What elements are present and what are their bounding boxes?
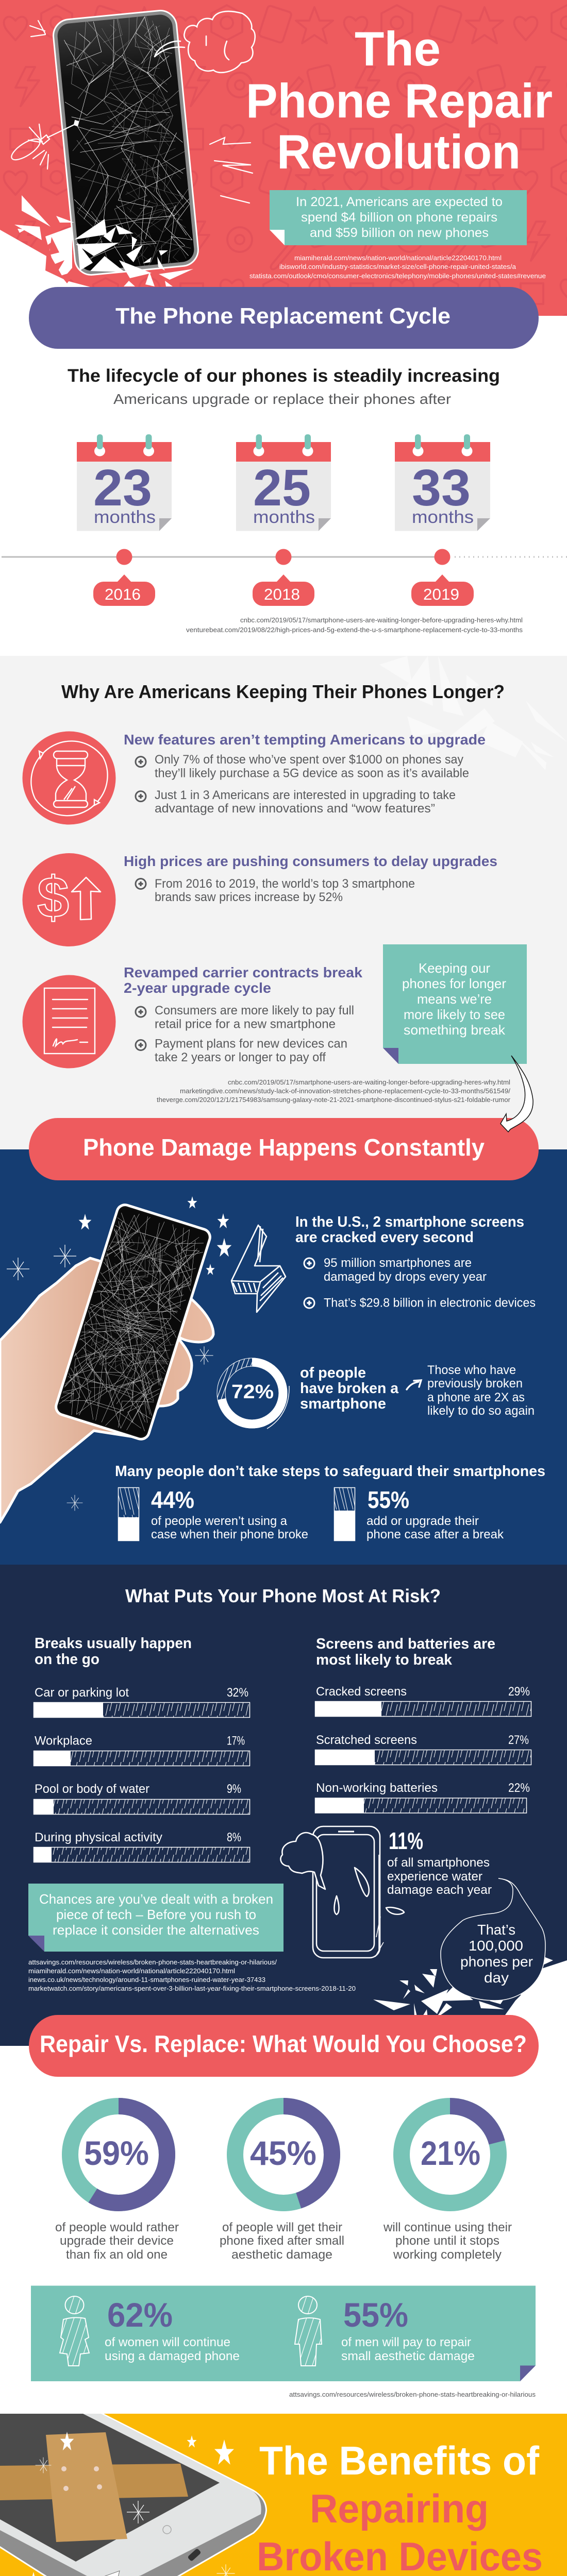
stat: water damage: 11%	[389, 1827, 423, 1854]
reasons sources: marketingdive.com/news/study-lack-of-innovation-stretches-phone-replacement-cycle-to-33-months/561549/	[180, 1087, 510, 1095]
section heading: replacement cycle: The Phone Replacement Cycle	[115, 303, 451, 329]
donut chart: 45 percent: aesthetic damage	[231, 2248, 332, 2262]
white torn corner under hero	[0, 230, 90, 319]
reason 1: new features: advantage of new innovations and “wow features”	[155, 802, 435, 816]
stat: water damage: of all smartphones	[387, 1856, 490, 1870]
stat: smartphone screens cracked: That’s $29.8 billion in electronic devices	[324, 1296, 536, 1310]
donut chart: 45 percent	[220, 2106, 344, 2262]
callout: consider alternatives: replace it consider the alternatives	[53, 1922, 259, 1938]
reasons sources: cnbc.com/2019/05/17/smartphone-users-are-waiting-longer-before-upgrading-heres-why.html	[228, 1078, 510, 1086]
callout: keeping phones longer: more likely to see	[404, 1007, 505, 1022]
lifecycle sources	[186, 616, 523, 634]
title: Revolution	[277, 125, 521, 179]
reason 2: high prices: High prices are pushing consumers to delay upgrades	[124, 853, 497, 869]
stat: likely to break again: previously broken	[427, 1377, 523, 1391]
donut chart: 21 percent: 21%	[421, 2134, 480, 2172]
bar chart: what breaks	[315, 1636, 531, 1814]
donut chart: 21 percent	[383, 2106, 512, 2262]
stat: have broken a smartphone	[300, 1365, 399, 1412]
risk sources: marketwatch.com/story/americans-spent-over-3-billion-last-year-fixing-their-smartphone-screens-2018-11-20	[28, 1985, 356, 1992]
stat: 55 percent of men: of men will pay to repair	[341, 2335, 471, 2349]
hero sources: miamiherald.com/news/nation-world/national/article222040170.html	[294, 254, 502, 262]
calendar: 2016: months	[94, 507, 156, 527]
donut chart: 59 percent: of people would rather	[55, 2221, 179, 2234]
bar chart: where breaks happen	[34, 1635, 249, 1862]
reason 1: new features: New features aren’t tempting Americans to upgrade	[124, 732, 486, 748]
stat: smartphone screens cracked	[295, 1214, 536, 1310]
stat: smartphone screens cracked: 95 million smartphones are	[324, 1256, 472, 1270]
reason 3: carrier contracts: Payment plans for new devices can	[155, 1037, 347, 1051]
donut chart: 59 percent	[55, 2106, 179, 2262]
timeline: 2018	[264, 585, 300, 603]
section background: what puts your phone at risk	[0, 1565, 567, 2046]
bar chart: where breaks happen: 8%	[227, 1831, 241, 1844]
icon: lightning bolt	[231, 1225, 286, 1312]
reasons sources	[157, 1078, 511, 1104]
stat: 62 percent of women: using a damaged phone	[105, 2349, 240, 2363]
section heading: phone damage: Phone Damage Happens Constantly	[83, 1134, 485, 1161]
stat: likely to break again: Those who have	[427, 1363, 516, 1377]
bar chart: what breaks: Cracked screens	[316, 1685, 407, 1699]
stat: smartphone screens cracked: damaged by drops every year	[324, 1270, 487, 1284]
donut chart: 72 percent	[217, 1358, 289, 1429]
icon: hourglass	[23, 732, 115, 824]
section heading: repair vs replace: Repair Vs. Replace: What Would You Choose?	[40, 2030, 527, 2057]
donut chart: 59 percent: 59%	[84, 2134, 149, 2172]
faint shards	[379, 656, 567, 770]
stat: 55 percent: add or upgrade their	[366, 1514, 479, 1528]
hand	[0, 1258, 213, 1522]
arrow to damage section	[501, 1056, 533, 1132]
icon: contract	[23, 975, 115, 1069]
bar chart: where breaks happen: During physical activity	[35, 1831, 162, 1844]
donut chart: 45 percent: of people will get their	[222, 2221, 342, 2234]
reason 1: new features: Only 7% of those who’ve spent over $1000 on phones say	[155, 753, 463, 767]
bar chart: where breaks happen: Car or parking lot	[35, 1686, 129, 1700]
stat: 55 percent of men: 55%	[343, 2296, 408, 2334]
title	[246, 22, 553, 179]
donut chart: 45 percent: 45%	[250, 2134, 316, 2172]
lifecycle heading: The lifecycle of our phones is steadily increasing	[68, 366, 500, 386]
stat: have broken a smartphone: of people	[300, 1365, 366, 1381]
risk sources	[28, 1958, 356, 1992]
stat: 44 percent	[118, 1486, 308, 1541]
callout: consider alternatives: piece of tech – Before you rush to	[56, 1907, 256, 1922]
callout: spending stat: In 2021, Americans are expected to	[296, 195, 503, 209]
lifecycle sources: cnbc.com/2019/05/17/smartphone-users-are-waiting-longer-before-upgrading-heres-why.html	[240, 616, 523, 624]
reason 3: carrier contracts	[124, 964, 362, 1064]
risk sources: attsavings.com/resources/wireless/broken-phone-stats-heartbreaking-or-hilarious/	[28, 1958, 277, 1966]
bar chart: where breaks happen: Workplace	[35, 1734, 92, 1748]
speech bubble: 100,000 phones per day: day	[484, 1970, 509, 1986]
stat: 44 percent: of people weren’t using a	[151, 1514, 288, 1528]
stat: 62 percent of women	[105, 2296, 240, 2363]
safeguard heading: Many people don’t take steps to safeguard their smartphones	[115, 1463, 545, 1480]
reason 1: new features: they’ll likely purchase a 5G device as soon as it’s available	[155, 766, 469, 780]
stat: have broken a smartphone: have broken a	[300, 1380, 399, 1397]
donut chart: 21 percent: phone until it stops	[395, 2234, 499, 2248]
timeline: 2019	[423, 585, 459, 603]
icon: water-damaged phone	[280, 1826, 404, 1958]
risk heading: What Puts Your Phone Most At Risk?	[125, 1585, 441, 1606]
bar chart: where breaks happen: Pool or body of water	[35, 1782, 149, 1796]
lifecycle subheading: Americans upgrade or replace their phones after	[113, 391, 451, 407]
donut chart: 59 percent: upgrade their device	[60, 2234, 174, 2248]
callout: consider alternatives: Chances are you’ve dealt with a broken	[39, 1891, 273, 1907]
bar chart: where breaks happen: 9%	[227, 1782, 241, 1796]
stat: smartphone screens cracked: In the U.S., 2 smartphone screens	[295, 1214, 524, 1230]
calendar: 2018: 25	[253, 459, 311, 517]
title: benefits of repairing: The Benefits of	[259, 2438, 540, 2483]
icon: dollar and arrow	[23, 853, 115, 946]
bar chart: where breaks happen: 32%	[227, 1686, 248, 1700]
white torn corner: risk section	[373, 1926, 567, 2048]
calendar: 2019: months	[412, 507, 474, 527]
calendar: 2019: 33	[412, 459, 471, 517]
stat: 55 percent of men	[341, 2296, 475, 2363]
bar chart: what breaks: 27%	[508, 1733, 529, 1747]
hero sources: statista.com/outlook/cmo/consumer-electronics/telephony/mobile-phones/united-states#revenue	[249, 272, 546, 280]
reason 2: high prices: From 2016 to 2019, the world’s top 3 smartphone	[155, 877, 415, 891]
stat: 55 percent of men: small aesthetic damage	[341, 2349, 475, 2363]
speech bubble: 100,000 phones per day: phones per	[460, 1954, 533, 1970]
risk sources: miamiherald.com/news/nation-world/national/article222040170.html	[28, 1967, 235, 1975]
stat: have broken a smartphone: smartphone	[300, 1396, 386, 1412]
section background: phone damage	[0, 1149, 567, 1565]
reason 3: carrier contracts: take 2 years or longer to pay off	[155, 1050, 326, 1064]
callout: spending stat: spend $4 billion on phone repairs	[301, 210, 497, 225]
stat: 55 percent	[334, 1486, 504, 1541]
callout: spending stat	[270, 190, 527, 245]
donut chart: 21 percent: will continue using their	[383, 2221, 512, 2234]
calendar: 2016	[77, 434, 172, 531]
stat: 62 percent of women: 62%	[107, 2296, 173, 2334]
section heading: phone damage	[29, 1118, 539, 1180]
red shard gaps	[44, 237, 77, 283]
bar chart: where breaks happen: 17%	[227, 1734, 245, 1748]
donut chart: 72 percent: 72%	[231, 1381, 274, 1403]
repair vs replace source: attsavings.com/resources/wireless/broken-phone-stats-heartbreaking-or-hilarious	[289, 2391, 536, 2398]
stat: water damage: damage each year	[387, 1883, 492, 1897]
reason 1: new features: Just 1 in 3 Americans are interested in upgrading to take	[155, 788, 456, 802]
icon: dollar and arrow: $	[37, 865, 69, 929]
timeline	[2, 549, 567, 606]
calendar: 2018: months	[253, 507, 315, 527]
callout: keeping phones longer: phones for longer	[402, 976, 506, 991]
stat: 44 percent: 44%	[151, 1486, 194, 1513]
bar chart: what breaks: 22%	[508, 1781, 530, 1795]
stars and sparkles	[26, 2432, 235, 2576]
callout: consider alternatives	[28, 1884, 284, 1952]
callout: keeping phones longer: Keeping our	[419, 960, 490, 976]
reason 3: carrier contracts: retail price for a new smartphone	[155, 1018, 336, 1031]
stat: water damage: experience water	[387, 1870, 482, 1884]
reason 3: carrier contracts: 2-year upgrade cycle	[124, 980, 271, 996]
stat: 55 percent: phone case after a break	[366, 1528, 504, 1541]
bar chart: where breaks happen: Breaks usually happen	[35, 1635, 192, 1652]
stat: water damage	[387, 1827, 492, 1897]
reason 1: new features	[124, 732, 486, 816]
title: The	[355, 22, 441, 76]
panel: women and men stats	[31, 2285, 536, 2381]
stat: likely to break again: a phone are 2X as	[427, 1391, 525, 1404]
hero phone photo	[52, 9, 199, 277]
bar chart: what breaks: Non-working batteries	[316, 1781, 438, 1795]
smoke cloud doodle	[155, 11, 255, 73]
title: Phone Repair	[246, 74, 553, 128]
lifecycle sources: venturebeat.com/2019/08/22/high-prices-and-5g-extend-the-u-s-smartphone-replacement-cycle-to-33-months	[186, 626, 523, 634]
callout: keeping phones longer: something break	[404, 1022, 506, 1038]
shattered glass shards	[14, 195, 193, 286]
callout: spending stat: and $59 billion on new phones	[310, 226, 489, 240]
spark lines and screwdriver doodle	[9, 21, 253, 203]
reasons sources: theverge.com/2020/12/1/21754983/samsung-galaxy-note-21-2021-smartphone-discontinued-stylus-s21-foldable-rumor	[157, 1096, 511, 1104]
callout: keeping phones longer	[383, 944, 527, 1064]
title: benefits of repairing	[257, 2438, 543, 2576]
reason 3: carrier contracts: Revamped carrier contracts break	[124, 964, 362, 980]
section background: benefits	[0, 2414, 567, 2576]
risk sources: inews.co.uk/news/technology/around-11-smartphones-ruined-water-year-37433	[28, 1976, 265, 1984]
donut chart: 21 percent: working completely	[393, 2248, 502, 2262]
calendar: 2019	[395, 434, 490, 531]
stat: 55 percent: 55%	[368, 1486, 409, 1513]
arrow: small	[407, 1380, 421, 1389]
stat: 44 percent: case when their phone broke	[151, 1528, 308, 1541]
stat: smartphone screens cracked: are cracked every second	[295, 1229, 474, 1246]
bar chart: where breaks happen: on the go	[35, 1651, 99, 1668]
hero sources	[249, 254, 546, 280]
donut chart: 45 percent: phone fixed after small	[220, 2234, 344, 2248]
section heading: replacement cycle	[29, 287, 539, 349]
hero sources: ibisworld.com/industry-statistics/market-size/cell-phone-repair-united-states/a	[279, 263, 516, 270]
icon: woman	[60, 2296, 89, 2366]
stat: likely to break again	[427, 1363, 535, 1418]
reason 2: high prices	[124, 853, 497, 904]
stat: likely to break again: likely to do so again	[427, 1404, 535, 1418]
speech bubble: 100,000 phones per day	[441, 1878, 545, 2001]
speech bubble: 100,000 phones per day: 100,000	[469, 1938, 523, 1954]
bandaged phone photo	[0, 2414, 268, 2576]
stat: 62 percent of women: of women will continue	[105, 2335, 230, 2349]
donut chart: 59 percent: than fix an old one	[66, 2248, 168, 2262]
stars and sparkles	[7, 1196, 231, 1511]
section background: why keeping phones longer	[0, 656, 567, 1149]
why heading: Why Are Americans Keeping Their Phones Longer?	[61, 681, 505, 702]
reason 2: high prices: brands saw prices increase by 52%	[155, 890, 343, 904]
section heading: repair vs replace	[29, 2015, 539, 2077]
callout: keeping phones longer: means we’re	[417, 991, 492, 1007]
timeline: 2016	[105, 585, 141, 603]
bar chart: what breaks: most likely to break	[316, 1652, 453, 1668]
title: benefits of repairing: Repairing	[310, 2486, 489, 2531]
bar chart: what breaks: Scratched screens	[316, 1733, 417, 1747]
calendar: 2016: 23	[93, 459, 152, 517]
reason 3: carrier contracts: Consumers are more likely to pay full	[155, 1004, 354, 1018]
bar chart: what breaks: Screens and batteries are	[316, 1636, 495, 1652]
icon: man	[295, 2296, 322, 2366]
speech bubble: 100,000 phones per day: That’s	[477, 1922, 515, 1938]
cracked phone in hand	[55, 1204, 211, 1440]
section background: hero	[0, 0, 567, 316]
bar chart: what breaks: 29%	[508, 1685, 530, 1699]
calendar: 2018	[236, 434, 331, 531]
